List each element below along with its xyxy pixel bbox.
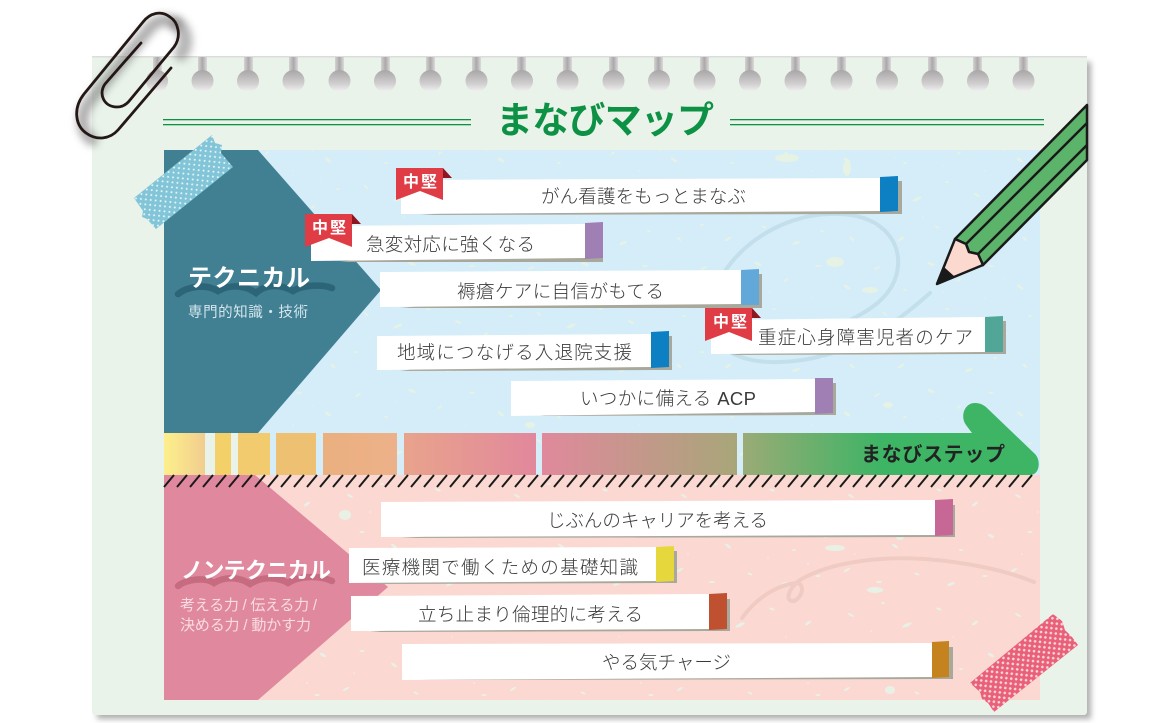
card: やる気チャージ: やる気チャージ	[602, 652, 731, 673]
card: 立ち止まり倫理的に考える	[351, 593, 730, 632]
heading: non-technical: ノンテクニカル	[181, 558, 331, 583]
badge: 中堅 がん看護	[396, 168, 452, 200]
card: 重症心身障害児者のケア	[711, 316, 1006, 355]
card: 褥瘡ケアに自信がもてる: 褥瘡ケアに自信がもてる	[457, 281, 664, 302]
panel: non-technical background	[164, 475, 1040, 700]
panel: notebook paper	[92, 56, 1091, 719]
card: じぶんのキャリアを考える: じぶんのキャリアを考える	[547, 510, 768, 531]
spiral holes	[146, 57, 1034, 92]
card: がん看護をもっとまなぶ: がん看護をもっとまなぶ	[541, 186, 746, 207]
badge: 中堅 重症心身	[705, 308, 761, 341]
card: じぶんのキャリアを考える	[381, 499, 955, 538]
card: 地域につなげる入退院支援: 地域につなげる入退院支援	[397, 342, 632, 363]
step arrow label: まなびステップ	[861, 443, 1005, 466]
sub text: non-technical: 考える力 / 伝える力 /	[180, 597, 318, 614]
card: 医療機関で働くための基礎知識	[349, 546, 677, 584]
pencil	[937, 105, 1087, 284]
badge: 中堅 がん看護: 中堅	[403, 173, 437, 191]
brush stroke	[178, 286, 332, 294]
title rule left	[163, 119, 471, 125]
brush stroke	[178, 577, 332, 586]
panel: technical background	[164, 150, 1040, 475]
panel: technical arrow block	[164, 150, 381, 433]
step arrow	[743, 403, 1039, 475]
step bar	[164, 403, 1039, 475]
card: 立ち止まり倫理的に考える: 立ち止まり倫理的に考える	[418, 604, 643, 625]
badge: 中堅 急変対応: 中堅	[312, 219, 346, 237]
badge: 中堅 急変対応	[305, 214, 361, 247]
sub text: non-technical	[180, 597, 318, 634]
tape: pink	[970, 614, 1078, 712]
badge: 中堅 重症心身: 中堅	[713, 313, 747, 331]
hatch divider	[164, 475, 1032, 487]
card: 急変対応に強くなる	[311, 222, 603, 262]
card: やる気チャージ	[402, 641, 953, 680]
card: 重症心身障害児者のケア: 重症心身障害児者のケア	[758, 327, 973, 348]
sub text: technical: 専門的知識・技術	[188, 304, 308, 321]
heading: technical: テクニカル	[188, 265, 310, 292]
card: いつかに備える ACP: いつかに備える ACP	[580, 388, 756, 409]
card: 急変対応に強くなる: 急変対応に強くなる	[366, 234, 535, 255]
title rule right	[730, 119, 1044, 125]
title: まなびマップ	[496, 100, 714, 141]
panel: non-technical arrow block	[164, 475, 388, 700]
card: 医療機関で働くための基礎知識: 医療機関で働くための基礎知識	[362, 557, 638, 578]
card: 地域につなげる入退院支援	[377, 331, 672, 371]
paper clip	[77, 13, 185, 140]
card: がん看護をもっとまなぶ	[401, 176, 902, 215]
tape: blue	[134, 135, 233, 229]
sub text: non-technical: 決める力 / 動かす力	[180, 617, 311, 634]
card: 褥瘡ケアに自信がもてる	[380, 269, 762, 308]
card: いつかに備える ACP	[511, 378, 836, 416]
